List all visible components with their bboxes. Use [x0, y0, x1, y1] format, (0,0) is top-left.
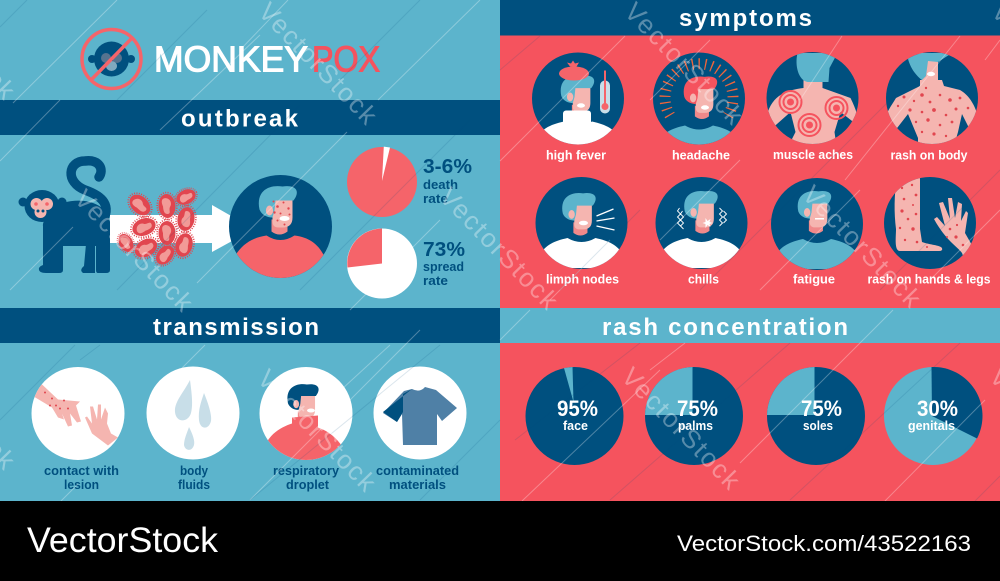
symptom: fatigue	[771, 178, 863, 286]
value: 30%	[917, 396, 958, 421]
icon: crossed monkey	[82, 30, 141, 88]
pie: genitals 30%	[884, 367, 982, 465]
label: body	[180, 464, 208, 478]
label: rash on body	[890, 148, 968, 162]
watermark: VectorStock repeats: VectorStock	[252, 363, 383, 498]
label	[178, 464, 210, 492]
watermark: VectorStock repeats: VectorStock	[434, 181, 565, 316]
footer bar	[0, 501, 1000, 581]
symptom: chills	[656, 177, 748, 286]
title: pox: POX	[312, 38, 380, 80]
icon group: virus particles	[114, 185, 200, 270]
symptom: muscle aches	[766, 52, 858, 162]
symptom: limph nodes	[536, 177, 628, 286]
heading band: symptoms	[500, 0, 1000, 36]
heading band: outbreak	[0, 100, 500, 135]
label	[273, 464, 339, 492]
label: materials	[389, 478, 446, 492]
heading band: rash concentration: rash concentration	[602, 314, 848, 341]
pie: face 95%	[526, 367, 624, 465]
label: soles	[803, 419, 833, 433]
label: limph nodes	[546, 272, 619, 286]
panel: teal left background	[0, 0, 500, 501]
label: death rate	[423, 178, 458, 206]
title: monkey: MONKEY	[154, 38, 308, 80]
panel: red right background	[500, 0, 1000, 501]
value: 75%	[677, 396, 718, 421]
label: lesion	[64, 478, 99, 492]
footer image id: VectorStock.com/43522163	[677, 531, 971, 556]
label: muscle aches	[773, 148, 853, 162]
watermark: VectorStock repeats: VectorStock	[253, 0, 384, 131]
label: high fever	[546, 148, 606, 162]
symptom: rash on hands and legs	[868, 177, 991, 286]
illustration: monkey	[18, 161, 110, 273]
heading band: outbreak: outbreak	[181, 106, 299, 132]
label: death rate: rate	[423, 192, 448, 206]
label: fluids	[178, 478, 210, 492]
value: 95%	[557, 396, 598, 421]
label: contact with	[44, 464, 119, 478]
illustration: infected person	[228, 175, 332, 278]
stat: 73%: 73%	[423, 239, 465, 261]
logo: monkey pox	[82, 30, 380, 88]
transmission: contaminated materials	[374, 366, 466, 492]
label: droplet	[286, 478, 330, 492]
label: spread rate: rate	[423, 274, 448, 288]
transmission: respiratory droplet	[260, 367, 352, 492]
watermark: VectorStock repeats: VectorStock	[619, 0, 750, 131]
label: palms	[678, 419, 713, 433]
symptom: rash on body	[884, 52, 980, 162]
watermark: VectorStock repeats: VectorStock	[797, 179, 928, 314]
transmission: contact with lesion	[32, 367, 124, 492]
label: genitals	[908, 419, 955, 433]
symptom: headache	[653, 52, 745, 162]
label: face	[563, 419, 588, 433]
transmission: body fluids	[146, 366, 240, 492]
symptom: high fever	[532, 52, 624, 162]
heading band: transmission: transmission	[153, 314, 319, 341]
footer brand: VectorStock	[27, 521, 219, 560]
label: spread rate: spread	[423, 260, 464, 274]
label: respiratory	[273, 464, 339, 478]
label: rash on hands & legs	[868, 272, 991, 286]
label	[376, 464, 459, 492]
heading band: transmission	[0, 308, 500, 343]
label: contaminated	[376, 464, 459, 478]
pie: soles 75%	[767, 367, 865, 465]
stat: 3-6%: 3-6%	[423, 156, 472, 178]
label: headache	[672, 148, 730, 162]
label: death rate: death	[423, 178, 458, 192]
watermark: VectorStock repeats: VectorStock	[616, 361, 747, 496]
heading band: rash concentration	[500, 308, 1000, 343]
heading band: symptoms: symptoms	[679, 5, 812, 32]
label: fatigue	[793, 272, 835, 286]
chart: death rate pie	[347, 147, 472, 217]
label: spread rate	[423, 260, 464, 288]
arrow: transmission to human	[110, 205, 254, 252]
watermark: VectorStock repeats: VectorStock	[69, 183, 200, 318]
pie: palms 75%	[645, 367, 743, 465]
chart: spread rate pie	[347, 228, 465, 298]
value: 75%	[801, 396, 842, 421]
label: chills	[688, 272, 719, 286]
label	[44, 464, 119, 492]
